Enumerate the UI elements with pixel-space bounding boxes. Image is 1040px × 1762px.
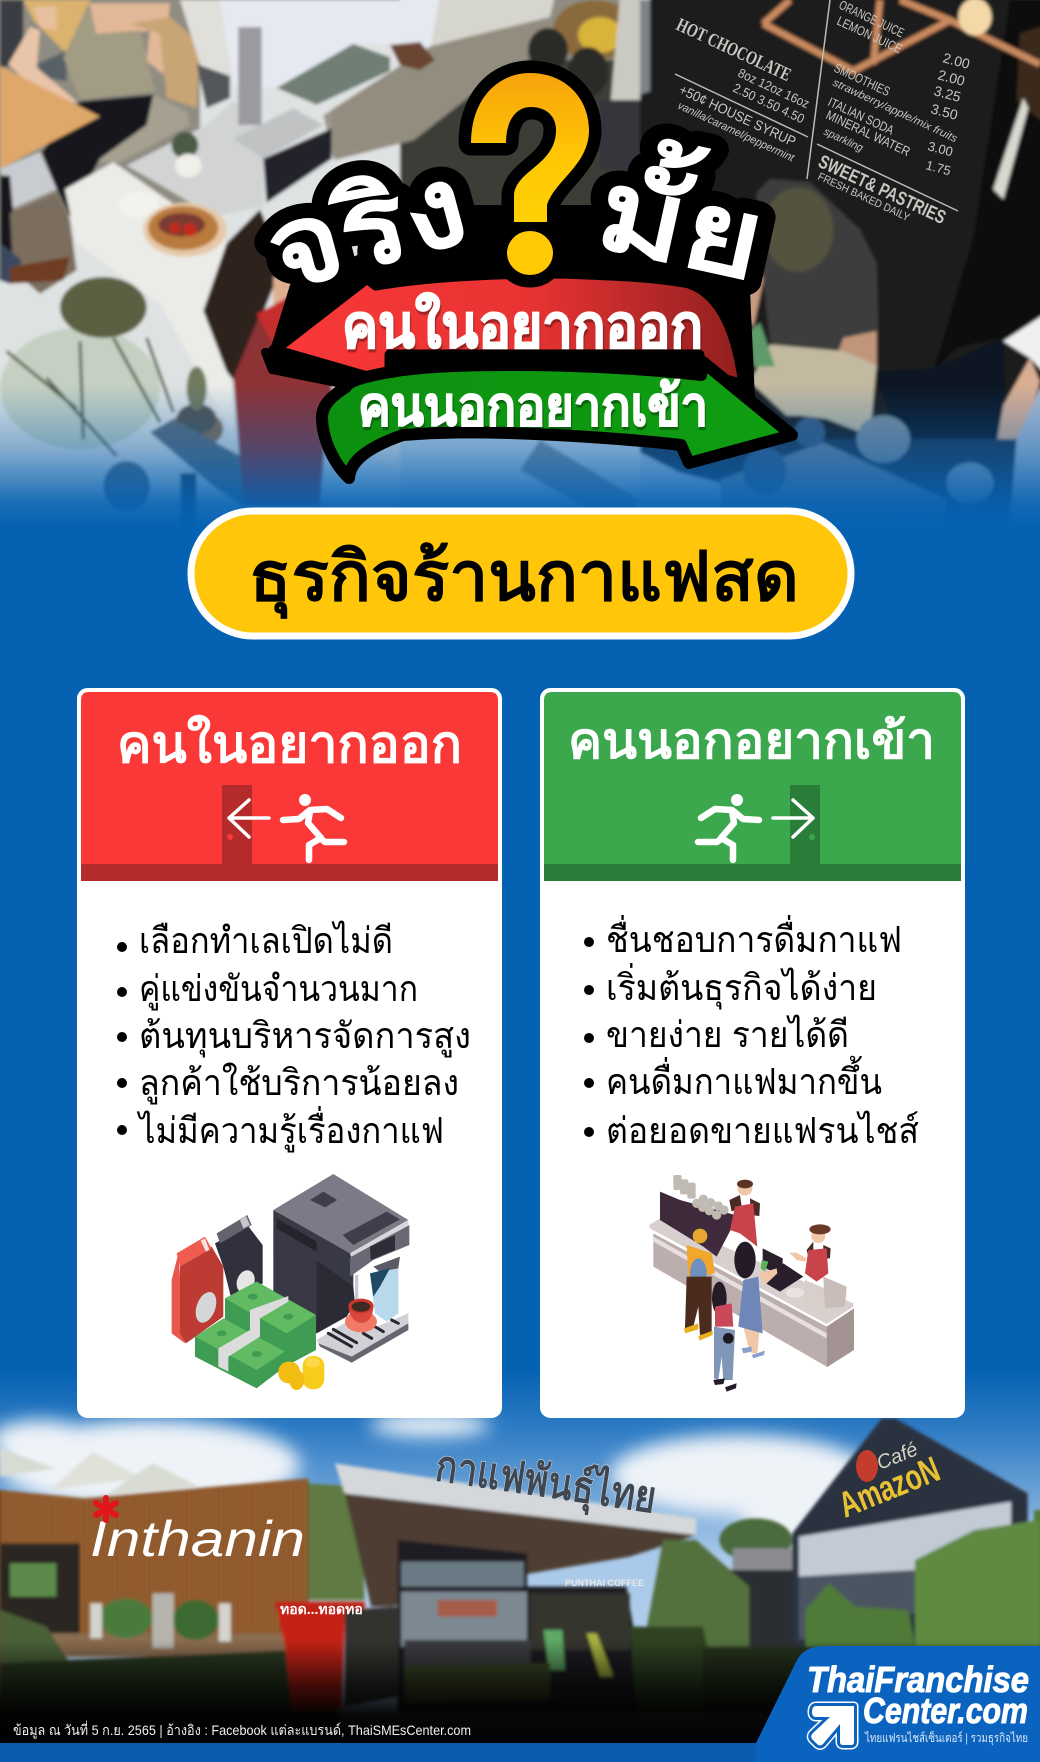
header: red band: [81, 692, 498, 881]
word: มั้ย: มั้ย: [587, 127, 779, 304]
chalkboard menu text: 3.50: [929, 100, 960, 123]
green arrow: outsiders want in: คนนอกอยากเข้า: [358, 377, 708, 437]
chalkboard menu text: 2.00: [941, 49, 972, 72]
word: จริง: จริง: [254, 142, 479, 314]
photo: coffee shop from above: [0, 0, 1040, 550]
chalkboard menu text: vanilla/caramel/peppermint: [676, 100, 797, 165]
chalkboard menu text: 2.50 3.50 4.50: [731, 80, 807, 126]
sign: Cafe Amazon: AmazoN: [833, 1448, 945, 1525]
photo: coffee shop brand storefronts: [0, 1370, 1040, 1760]
illustration: customers at coffee counter: [649, 1175, 854, 1392]
header: red band: คนในอยากออก: [117, 714, 462, 774]
chalkboard menu text: SWEET& PASTRIES: [815, 151, 949, 229]
chalkboard menu text: SMOOTHIES: [832, 60, 893, 99]
sign: Thai coffee breed: กาแฟพันธุ์ไทย: [432, 1439, 660, 1526]
header: green band: [544, 692, 961, 881]
chalkboard menu text: 2.00: [936, 66, 967, 89]
red arrow: insiders want out: [265, 273, 744, 390]
list: reasons to leave: คู่แข่งขันจำนวนมาก: [139, 968, 418, 1011]
list: reasons to join: ขายง่าย รายได้ดี: [606, 1014, 849, 1055]
chalkboard menu text: FRESH BAKED DAILY: [816, 171, 912, 224]
sign: Cafe Amazon: [842, 1441, 941, 1518]
source note: ข้อมูล ณ วันที่ 5 ก.ย. 2565 | อ้างอิง : Facebook แต่ละแบรนด์, ThaiSMEsCenter.com: [13, 1721, 471, 1739]
illustration: coffee machine, beans bags and money: [172, 1174, 409, 1390]
chalkboard menu text: LEMON JUICE: [835, 13, 905, 56]
list: reasons to join: เริ่มต้นธุรกิจได้ง่าย: [606, 963, 877, 1010]
logo: ThaiFranchise Center.com: [756, 1646, 1040, 1762]
footer strip: [0, 1743, 1040, 1762]
chalkboard menu text: strawberry/apple/mix fruits: [831, 77, 960, 145]
list: reasons to leave: เลือกทำเลเปิดไม่ดี: [139, 920, 393, 961]
panel: insiders want out: [78, 690, 500, 1416]
header: green band: คนนอกอยากเข้า: [568, 713, 935, 769]
chalkboard menu text: 3.00: [926, 138, 955, 159]
list: reasons to leave: ไม่มีความรู้เรื่องกาแฟ: [136, 1106, 444, 1153]
icon: person running into door: [698, 785, 820, 864]
sign: red shop awning: ทอด...ทอดทอ: [280, 1601, 363, 1617]
question mark: [471, 73, 589, 275]
chalkboard menu text: 1.75: [924, 157, 953, 178]
green arrow: outsiders want in: [322, 362, 792, 478]
chalkboard menu text: 8oz 12oz 16oz: [736, 65, 812, 111]
subject pill: fresh coffee shop business: ธุรกิจร้านกาแฟสด: [249, 539, 799, 619]
list: reasons to leave: ลูกค้าใช้บริการน้อยลง: [139, 1062, 459, 1105]
icon: person running out of door: [222, 785, 344, 864]
red arrow: insiders want out: คนในอยากออก: [342, 292, 703, 360]
chalkboard menu text: MINERAL WATER: [824, 107, 913, 159]
icon: Inthanin flower: [96, 1498, 116, 1520]
black backing behind title: [270, 205, 755, 400]
list: reasons to join: คนดื่มกาแฟมากขึ้น: [606, 1055, 882, 1102]
list: reasons to join: ต่อยอดขายแฟรนไชส์: [606, 1110, 919, 1151]
icon: up-right arrow: [811, 1706, 854, 1746]
chalkboard menu text: 3.25: [932, 82, 963, 105]
chalkboard menu text: sparkling: [822, 126, 866, 155]
chalkboard menu text: HOT CHOCOLATE: [673, 14, 794, 86]
list: reasons to join: [584, 915, 919, 1151]
sign: Punthai coffee: PUNTHAI COFFEE: [565, 1578, 644, 1588]
list: reasons to leave: [117, 920, 471, 1153]
sign: Cafe Amazon: Café: [874, 1438, 921, 1475]
title logo: real or not: [254, 73, 792, 478]
sign: Inthanin: Inthanin: [90, 1511, 305, 1567]
list: reasons to join: ชื่นชอบการดื่มกาแฟ: [606, 915, 902, 960]
panel: outsiders want in: [542, 690, 964, 1416]
chalkboard menu text: +50¢ HOUSE SYRUP: [677, 81, 799, 149]
list: reasons to leave: ต้นทุนบริหารจัดการสูง: [139, 1015, 471, 1058]
subject pill: fresh coffee shop business: [191, 511, 851, 636]
chalkboard menu text: [673, 0, 972, 229]
chalkboard menu text: ITALIAN SODA: [826, 94, 897, 138]
